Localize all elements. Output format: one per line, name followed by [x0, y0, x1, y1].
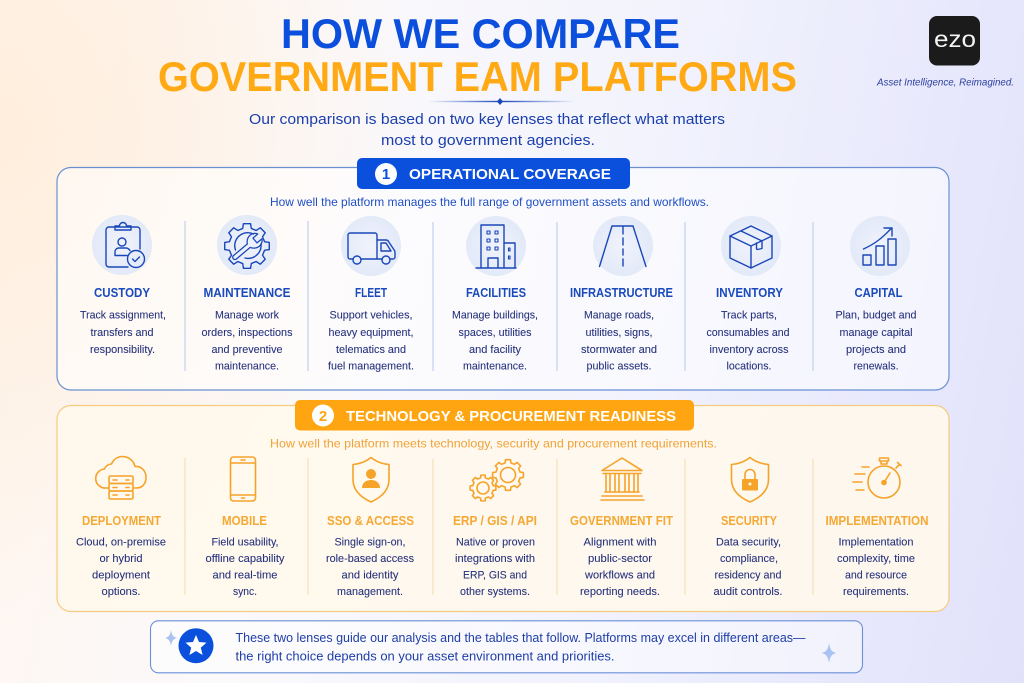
card: erp gis api — [453, 460, 537, 598]
card: fleet: Support vehicles, — [330, 310, 412, 322]
icon: stopwatch — [853, 458, 901, 498]
card: mobile: sync. — [233, 586, 257, 598]
card: maintenance — [202, 215, 293, 372]
card: capital: Plan, budget and — [836, 310, 916, 322]
card: maintenance: MAINTENANCE — [204, 286, 290, 300]
card: inventory — [706, 216, 790, 372]
badge: operational coverage: 1 — [382, 166, 390, 183]
subtitle: Our comparison is based on two key lenses that reflect what matters — [249, 111, 725, 128]
card: maintenance: maintenance. — [215, 360, 279, 372]
icon: growth chart — [850, 216, 910, 276]
card: implementation — [826, 458, 928, 598]
title — [158, 10, 797, 100]
card: security: compliance, — [720, 553, 778, 565]
card: inventory: locations. — [726, 360, 772, 372]
card: sso and access: SSO & ACCESS — [327, 514, 414, 528]
card: infrastructure: stormwater and — [581, 344, 657, 356]
card: government fit: public-sector — [588, 553, 652, 565]
callout: footer note — [150, 621, 862, 673]
card: deployment: Cloud, on-premise — [76, 537, 166, 549]
card: sso and access — [326, 458, 414, 598]
card: security: Data security, — [716, 537, 781, 549]
card: capital: manage capital — [840, 327, 912, 339]
card: infrastructure — [570, 216, 673, 372]
card: facilities: and facility — [469, 344, 521, 356]
panel: technology and procurement readiness — [57, 400, 949, 612]
badge: technology and procurement readiness: TECHNOLOGY & PROCUREMENT READINESS — [346, 408, 676, 425]
card: capital: CAPITAL — [854, 286, 903, 300]
card: security — [714, 458, 782, 598]
card: implementation: complexity, time — [837, 553, 915, 565]
card: security: audit controls. — [714, 586, 782, 598]
icon: clipboard with person — [92, 215, 152, 275]
card: government fit: reporting needs. — [580, 586, 660, 598]
card: fleet: heavy equipment, — [328, 327, 414, 339]
icon: two gears — [470, 460, 523, 501]
card: erp gis api: ERP / GIS / API — [453, 514, 537, 528]
card: implementation: IMPLEMENTATION — [826, 514, 928, 528]
icon: road — [593, 216, 653, 276]
badge: technology and procurement readiness — [295, 400, 694, 430]
card: implementation: Implementation — [838, 537, 914, 549]
footer text: These two lenses guide our analysis and the tables that follow. Platforms may excel in different areas— — [236, 631, 806, 645]
card: infrastructure: utilities, signs, — [586, 327, 652, 339]
icon: sparkle right — [822, 643, 836, 663]
card: implementation: and resource — [845, 570, 907, 582]
card: fleet: fuel management. — [328, 360, 414, 372]
card: facilities: maintenance. — [463, 360, 527, 372]
card: erp gis api: integrations with — [455, 553, 535, 565]
card: infrastructure: Manage roads, — [584, 310, 654, 322]
card: capital: projects and — [846, 344, 906, 356]
card: erp gis api: other systems. — [460, 586, 530, 598]
card: deployment — [76, 456, 166, 598]
card: inventory: inventory across — [710, 344, 789, 356]
card: government fit — [570, 458, 673, 598]
card: fleet: FLEET — [355, 286, 387, 300]
card: mobile — [206, 457, 285, 598]
card: inventory: consumables and — [706, 327, 790, 339]
card: deployment: DEPLOYMENT — [82, 514, 161, 528]
card: facilities: spaces, utilities — [458, 327, 532, 339]
card: deployment: options. — [102, 586, 140, 598]
title: GOVERNMENT EAM PLATFORMS — [158, 53, 797, 100]
card: security: SECURITY — [721, 514, 778, 528]
card: mobile: Field usability, — [212, 537, 278, 549]
icon: shield with lock — [732, 458, 768, 502]
panel: operational coverage — [57, 158, 949, 390]
card: infrastructure: INFRASTRUCTURE — [570, 286, 673, 300]
title: HOW WE COMPARE — [281, 10, 680, 57]
panel description: How well the platform meets technology, security and procurement requirements. — [270, 436, 717, 450]
badge: operational coverage — [357, 158, 630, 189]
card: facilities: FACILITIES — [466, 286, 526, 300]
card: inventory: Track parts, — [721, 310, 777, 322]
card: fleet — [328, 216, 414, 372]
subtitle — [249, 111, 725, 149]
card: sso and access: management. — [337, 586, 403, 598]
card: facilities — [452, 216, 538, 372]
card: deployment: or hybrid — [100, 553, 142, 565]
icon: box — [721, 216, 781, 276]
card: custody: CUSTODY — [94, 286, 151, 300]
card: maintenance: orders, inspections — [202, 327, 293, 339]
panel description: How well the platform manages the full range of government assets and workflows. — [270, 195, 709, 209]
icon: cloud server — [96, 456, 146, 499]
icon: shield with person — [353, 458, 389, 502]
card: sso and access: and identity — [342, 570, 399, 582]
card: inventory: INVENTORY — [716, 286, 784, 300]
card: erp gis api: Native or proven — [456, 537, 535, 549]
icon: gear and wrench — [217, 215, 277, 275]
card: mobile: and real-time — [212, 570, 278, 582]
card: mobile: MOBILE — [222, 514, 267, 528]
card: sso and access: role-based access — [326, 553, 414, 565]
logo: ezo — [934, 26, 976, 52]
logo — [929, 16, 980, 66]
card: custody — [80, 215, 166, 356]
card: fleet: telematics and — [336, 344, 406, 356]
icon: sparkle left — [165, 630, 177, 646]
card: government fit: workflows and — [584, 570, 655, 582]
card: government fit: GOVERNMENT FIT — [570, 514, 673, 528]
card: maintenance: Manage work — [215, 310, 279, 322]
card: mobile: offline capability — [206, 553, 285, 565]
card: custody: transfers and — [90, 327, 154, 339]
card: custody: responsibility. — [90, 344, 155, 356]
card: government fit: Alignment with — [584, 537, 656, 549]
card: infrastructure: public assets. — [586, 360, 652, 372]
card: deployment: deployment — [92, 570, 151, 582]
icon: star badge — [178, 628, 214, 663]
card: erp gis api: ERP, GIS and — [463, 570, 527, 582]
card: implementation: requirements. — [843, 586, 909, 598]
subtitle: most to government agencies. — [381, 132, 595, 149]
card: capital: renewals. — [854, 360, 898, 372]
logo tagline: Asset Intelligence, Reimagined. — [876, 78, 1014, 88]
icon: phone — [230, 457, 256, 501]
card: capital — [836, 216, 916, 372]
footer text: the right choice depends on your asset environment and priorities. — [236, 650, 614, 664]
card: maintenance: and preventive — [212, 344, 282, 356]
card: security: residency and — [714, 570, 782, 582]
title divider — [428, 98, 575, 105]
card: custody: Track assignment, — [80, 310, 166, 322]
footer text — [236, 631, 806, 664]
icon: truck — [341, 216, 401, 276]
card: facilities: Manage buildings, — [452, 310, 538, 322]
badge: operational coverage: OPERATIONAL COVERAGE — [409, 166, 611, 183]
badge: technology and procurement readiness: 2 — [319, 408, 327, 425]
icon: buildings — [466, 216, 526, 276]
icon: government building — [601, 458, 644, 500]
card: sso and access: Single sign-on, — [334, 537, 406, 549]
